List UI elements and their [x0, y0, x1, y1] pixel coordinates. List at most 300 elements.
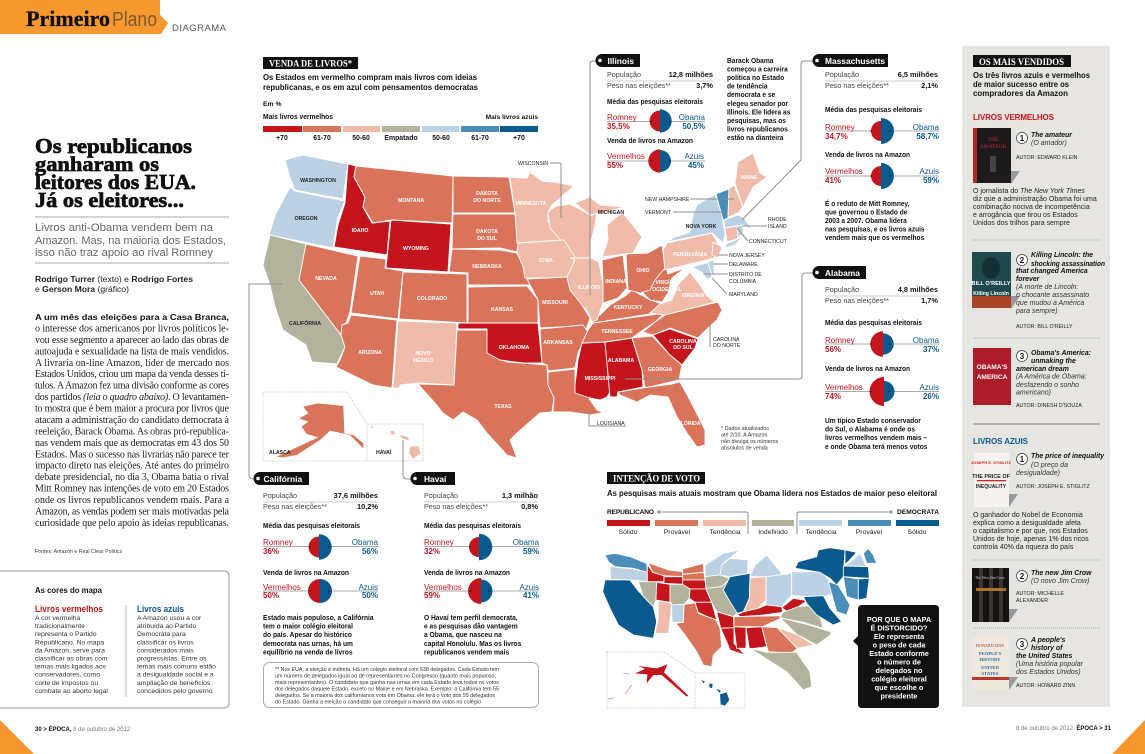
map callout labels [518, 161, 788, 427]
chart: vendas California: 50% [362, 591, 378, 600]
panel heading: venda de livros: VENDA DE LIVROS* [269, 58, 352, 68]
map labels: WASHINGTON [300, 178, 336, 184]
map callout labels: NEW HAMPSHIRE [645, 197, 690, 203]
callout: por que o mapa é distorcido: colégio eleitoral [871, 674, 927, 684]
text: livros vermelhos: temas mais ligados aos [35, 664, 107, 671]
cartogram: voting intention [603, 548, 877, 690]
text: livros vermelhos: representa o Partido [35, 631, 97, 638]
text: Massachusetts note: É o reduto de Mitt Romney, [825, 199, 910, 208]
card: Illinois [596, 54, 713, 173]
chart: pesquisas Alabama: 56% [825, 345, 841, 354]
book: Obama's America: AMERICA [977, 374, 1008, 381]
map labels: NEBRASKA [472, 264, 502, 270]
book: Killing Lincoln: o chocante assassinato [1016, 292, 1089, 299]
card: Massachusetts: Média das pesquisas eleitorais [825, 105, 922, 114]
body text: o interesse dos americanos por livros políticos le- [35, 323, 229, 334]
map labels: MONTANA [398, 198, 424, 204]
text: livros vermelhos: classificar as obras com [35, 656, 108, 662]
text: Barack Obama note: Illinois. Ele lidera as [727, 109, 791, 116]
text: Massachusetts note [825, 199, 925, 242]
US map: book sales by state [263, 153, 767, 458]
chart: pesquisas Alabama: Romney [825, 336, 855, 345]
map callout labels: LOUISIANA [597, 421, 625, 427]
book: The price of inequality: (O preço da [1031, 462, 1068, 469]
card: Alabama: População [825, 285, 859, 294]
book: The new Jim Crow: (O novo Jim Crow) [1031, 578, 1089, 585]
footer right [1016, 720, 1145, 754]
body text: curiosidade que pelo apoio às ideias republicanas. [35, 518, 229, 529]
book: Killing Lincoln: (A morte de Lincoln: [1016, 284, 1078, 291]
book: The new Jim Crow: ALEXANDER [1016, 598, 1048, 604]
card: Havai: População [424, 491, 458, 500]
chart: vendas California: 50% [263, 591, 279, 600]
text: livros vermelhos [35, 604, 108, 695]
text: livros vermelhos: conservadores, como [35, 672, 100, 679]
text: Barack Obama note: pesquisas, mas os [727, 118, 786, 125]
chart: vendas Havai: Vermelhos [424, 583, 462, 592]
header: Primeiro Plano tab: DIAGRAMA [172, 23, 227, 34]
book: The amateur: AMATEUR [980, 144, 1007, 150]
text: livros vermelhos: A cor vermelha [35, 615, 81, 622]
map labels: FLÓRIDA [677, 419, 701, 427]
chart: vendas Massachusetts: 59% [923, 176, 939, 185]
book: Obama's America: (A América de Obama: [1016, 374, 1087, 380]
map labels: ARIZONA [358, 350, 382, 356]
panel heading: venda de livros: Em % [263, 101, 282, 108]
panel heading: intenção de voto: As pesquisas mais atuais mostram que Obama lidera nos Estados de maior peso eleitoral [607, 489, 937, 498]
callout: por que o mapa é distorcido: POR QUE O MAPA [867, 615, 932, 624]
map callout labels: COLÚMBIA [729, 278, 757, 285]
legend: venda de livros: Mais livros vermelhos [263, 114, 333, 121]
text: livros azuis: temas mais comuns estão [137, 664, 216, 671]
book: Killing Lincoln: AUTOR: BILL O'REILLY [1016, 324, 1073, 330]
text: Alabama note: e onde Obama terá menos votos [825, 444, 928, 451]
chart: pesquisas California: Obama [352, 538, 379, 547]
panel: as cores do mapa [0, 571, 229, 708]
legend: intenção de voto [607, 509, 939, 536]
leader lines [249, 61, 813, 479]
card: Alabama: Média das pesquisas eleitorais [825, 318, 922, 327]
book: Killing Lincoln [972, 252, 1105, 330]
chart: vendas Havai [424, 578, 539, 604]
book: Killing Lincoln: 2 [1020, 256, 1025, 265]
text: The amateur description [973, 188, 1097, 227]
chart: vendas California: Azuis [358, 583, 378, 592]
book: Obama's America: americano) [1016, 390, 1051, 396]
card: Havai [410, 472, 540, 656]
card: Illinois: 12,8 milhões [669, 70, 713, 79]
chart: vendas Havai: Azuis [519, 583, 539, 592]
book: A people's history: UNITED [981, 665, 1000, 670]
text: livros azuis: concedidos pelo governo [137, 688, 213, 695]
text: Barack Obama note: estão na dianteira [727, 135, 784, 142]
card: California: Peso nas eleições** [263, 502, 327, 511]
chart: pesquisas Havai [424, 534, 540, 560]
map labels: VIRGÍNIA [655, 278, 679, 286]
legend: venda de livros: +70 [276, 135, 288, 142]
text: livros vermelhos: combate ao aborto legal [35, 688, 108, 695]
map labels: ILLINOIS [578, 285, 600, 291]
text: Havai note: e as pesquisas dão vantagem [424, 623, 518, 631]
book: The price of inequality: THE PRICE OF [972, 474, 1011, 480]
map labels: INDIANA [605, 279, 627, 285]
text: Barack Obama note [727, 58, 791, 142]
map callout labels: RHODE [768, 217, 787, 223]
chart: pesquisas Alabama: Obama [913, 336, 940, 345]
text: Barack Obama note: livros republicanos [727, 126, 788, 134]
body text: vou esse segmento a aparecer ao lado das obras de [35, 335, 230, 346]
callout: por que o mapa é distorcido: o número de [877, 658, 921, 666]
book: The amateur [973, 128, 1078, 184]
map callout labels: NOVA JERSEY [729, 253, 765, 259]
map labels: MÉXICO [413, 356, 433, 364]
chart: vendas Massachusetts: Vermelhos [825, 167, 863, 176]
card: California: Média das pesquisas eleitorais [263, 521, 360, 530]
footnote box: colégio eleitoral: dos delegados daquele Estado, exceto no Maine e em Nebraska. Exemplo: a Califórnia tem 55 [275, 686, 499, 692]
inset: Alaska and Hawaii: HAVAÍ [376, 448, 392, 456]
cartogram insets: Alaska and Hawaii [607, 652, 745, 708]
map labels: VIRGÍNIA [681, 291, 705, 299]
book: Obama's America [973, 348, 1091, 409]
card: Massachusetts [813, 54, 940, 242]
legend: intenção de voto: Provável [856, 529, 883, 536]
body text: Amazon, as vendas podem ser mais motivadas pela [35, 506, 230, 518]
callout: por que o mapa é distorcido: que escolhe o [875, 683, 924, 692]
callout: por que o mapa é distorcido: É DISTORCIDO? [870, 624, 928, 632]
book: The price of inequality: desigualdade) [1016, 470, 1060, 477]
chart: vendas Alabama [825, 377, 939, 406]
book: The amateur: AUTOR: EDWARD KLEIN [1016, 155, 1078, 161]
body text: reeleição, Barack Obama. As obras pró-republica- [35, 426, 229, 437]
text: The amateur description: Unidos dos trilhos para sempre [973, 220, 1070, 227]
map labels: ALABAMA [608, 358, 634, 364]
text: Barack Obama note: política no Estado [727, 75, 784, 82]
sources note: Fontes: Amazon e Real Clear Politics [35, 549, 122, 555]
map labels: CAROLINA [669, 339, 697, 345]
body text: dos partidos (leia o quadro abaixo). O levantamen- [35, 392, 229, 403]
map labels: ARKANSAS [543, 340, 573, 346]
text: The price of inequality description: controla 40% da riqueza do país [973, 544, 1074, 551]
book: The new Jim Crow: 2 [1020, 572, 1025, 581]
text: Barack Obama note: Barack Obama [727, 58, 774, 65]
card: Havai: Média das pesquisas eleitorais [424, 521, 521, 530]
title: Os republicanos [35, 134, 192, 158]
body text: Mitt Romney nas intenções de voto em 20 Estados [35, 484, 229, 495]
book: Killing Lincoln: Killing Lincoln: the [1031, 252, 1093, 259]
text: Havai note: republicanos vendem mais [424, 649, 509, 656]
chart: vendas Illinois: Azuis [684, 152, 704, 161]
text: Barack Obama note: começou a carreira [727, 66, 788, 74]
text: California note: do país. Apesar do histórico [263, 632, 352, 639]
legend: intenção de voto: Tendência [710, 529, 741, 536]
body text: tulos. A Amazon fez uma divisão conforme as cores [35, 381, 229, 392]
chart: vendas Havai: 59% [424, 591, 440, 600]
chart: vendas Massachusetts [825, 163, 939, 189]
authors byline: e Gerson Mora (gráfico) [35, 285, 129, 294]
chart: pesquisas Havai: Obama [513, 538, 540, 547]
card: Alabama: 4,8 milhões [898, 285, 938, 294]
chart: pesquisas California: 36% [263, 547, 279, 556]
book: A people's history: history of [1031, 645, 1063, 652]
book: A people's history [972, 637, 1084, 690]
card: Havai: 0,8% [521, 502, 538, 511]
book: A people's history: STATES [982, 671, 999, 676]
book: A people's history: 3 [1020, 640, 1025, 649]
card: Massachusetts: Venda de livros na Amazon [825, 150, 910, 159]
map callout labels: CAROLINA [713, 337, 740, 343]
book: A people's history: AUTOR: HOWARD ZINN [1016, 683, 1075, 689]
authors byline [35, 275, 194, 294]
panel: as cores do mapa: As cores do mapa [35, 585, 102, 595]
chart: vendas California: Vermelhos [263, 583, 301, 592]
map labels: PENSILVÂNIA [673, 251, 707, 258]
body text: Estados. Mas o sucesso nas livrarias não parece ter [35, 449, 230, 460]
text: California note [263, 615, 374, 656]
map labels: NOVA YORK [686, 224, 717, 230]
footer left: 30 > ÉPOCA, 8 de outubro de 2012 [35, 725, 131, 733]
card: Alabama: Peso nas eleições** [825, 296, 889, 305]
chart: pesquisas Havai: Romney [424, 538, 454, 547]
book: A people's history: A people's [1030, 637, 1065, 644]
body text: to mostra que é bem maior a procura por livros que [35, 404, 230, 414]
map labels: WYOMING [403, 246, 429, 252]
text: The amateur description: diz que a administração Obama foi uma [973, 196, 1097, 203]
footnote box: colégio eleitoral: do Estado. Ganha a eleição o candidato que conseguir a maioria dos votos no colégio [275, 699, 481, 705]
card: Alabama: Venda de livros na Amazon [825, 364, 910, 373]
callout: por que o mapa é distorcido: Estado conforme [869, 649, 929, 658]
book: A people's history: HOWARD ZINN [976, 643, 1004, 648]
chart: pesquisas Massachusetts [825, 118, 940, 144]
map callout labels: WISCONSIN [518, 161, 548, 167]
legend: venda de livros: Mais livros azuis [486, 114, 538, 121]
card: California: População [263, 491, 297, 500]
text: livros azuis: Democrata para [137, 631, 186, 638]
legend: intenção de voto: Provável [664, 529, 691, 536]
chart: vendas Illinois: Vermelhos [607, 152, 645, 161]
chart: pesquisas Alabama [825, 331, 940, 357]
book: The price of inequality: The price of inequality [1031, 453, 1105, 460]
chart: vendas Massachusetts: 41% [825, 176, 841, 185]
card: Illinois: Peso nas eleições** [607, 81, 671, 90]
book: Obama's America: american dream [1016, 366, 1069, 373]
map callout labels: DO NORTE [713, 343, 741, 349]
text: livros vermelhos: tradicionalmente [35, 623, 85, 630]
map labels: OREGON [294, 216, 318, 222]
chart: pesquisas Alabama: 37% [923, 345, 939, 354]
panel heading: venda de livros: republicanas, e os em azul com pensamentos democratas [263, 83, 478, 92]
map callout labels: DISTRITO DE [729, 272, 762, 278]
text: Massachusetts note: vendem mais que os vermelhos [825, 235, 924, 242]
footnote: data: absolutos de venda [721, 446, 768, 452]
legend: venda de livros: 61-70 [471, 135, 489, 142]
subtitle: isso não traz apoio ao rival Romney [35, 247, 213, 259]
body text: A livraria on-line Amazon, líder de mercado nos [35, 358, 229, 369]
title: Já os eleitores... [35, 188, 184, 212]
chart: vendas Alabama: Vermelhos [825, 383, 863, 392]
text: livros azuis [137, 604, 216, 695]
title: leitores dos EUA. [35, 170, 196, 194]
text: The price of inequality description: O ganhador do Nobel de Economia [973, 512, 1083, 519]
card: Illinois: 3,7% [696, 81, 713, 90]
text: The amateur description: e arrogância que tirou os Estados [973, 212, 1078, 219]
map labels: KENTUCKY [614, 305, 643, 311]
card: Massachusetts: 6,5 milhões [898, 70, 938, 79]
legend: venda de livros: 50-60 [352, 135, 370, 142]
book: The amateur: (O amador) [1031, 140, 1067, 147]
book: Killing Lincoln: BILL O'REILLY [972, 281, 1011, 287]
body text: atacam a administração do candidato democrata à [35, 415, 230, 426]
book: A people's history: (Uma história popular [1016, 661, 1084, 668]
card: Illinois: Média das pesquisas eleitorais [607, 97, 703, 106]
book: The amateur: The amateur [1031, 132, 1072, 139]
legend: venda de livros: 50-60 [432, 135, 450, 142]
text: Massachusetts note: 2003 a 2007. Obama lidera [825, 218, 907, 225]
map callout labels: ISLAND [768, 224, 787, 230]
footnote: data: * Dados atualizados [721, 426, 769, 432]
legend: intenção de voto: Tendência [806, 529, 837, 536]
text: Havai note: capital Honolulu. Mas os livros [424, 641, 521, 648]
chart: pesquisas Illinois: Romney [607, 113, 637, 122]
book: The new Jim Crow [972, 568, 1092, 622]
footer left [0, 720, 131, 754]
text: livros azuis: classificar os livros [137, 639, 194, 646]
body text: autoajuda e sexualidade na lista de mais vendidos. [35, 346, 229, 357]
map labels: NOVO [415, 351, 431, 357]
chart: pesquisas Massachusetts: Romney [825, 123, 855, 132]
text: livros vermelhos: corte de impostos ou [35, 680, 98, 687]
legend: intenção de voto: DEMOCRATA [897, 509, 939, 516]
callout: por que o mapa é distorcido: Ele representa [874, 632, 925, 641]
chart: vendas Illinois [607, 149, 705, 173]
footnote box: colégio eleitoral: delegados. Se a maioria dos californianos vota em Obama, ele terá o voto dos 55 delegados [275, 693, 495, 699]
map labels: UTAH [370, 291, 384, 297]
card: Massachusetts: Massachusetts [825, 56, 885, 66]
card: Alabama: Alabama [825, 268, 860, 278]
callout: por que o mapa é distorcido [853, 605, 939, 708]
card: Massachusetts: 2,1% [921, 81, 938, 90]
map labels: IDAHO [352, 228, 368, 234]
panel: os mais vendidos: LIVROS VERMELHOS [973, 113, 1055, 122]
chart: vendas Illinois: 45% [688, 161, 704, 170]
body text: debate presidencial, no dia 3, Obama batia o rival [35, 472, 229, 483]
text: Barack Obama note: democrata e se [727, 92, 775, 99]
chart: vendas Havai: 41% [523, 591, 539, 600]
book: The price of inequality: 1 [1020, 455, 1025, 464]
card: Havai: Havaí [424, 474, 447, 484]
panel: os mais vendidos: de maior sucesso entre os [973, 80, 1070, 89]
card: Massachusetts: População [825, 70, 859, 79]
legend: venda de livros [263, 114, 538, 142]
book: Killing Lincoln: para sempre) [1015, 308, 1058, 315]
book: Killing Lincoln: forever [1016, 276, 1040, 283]
text: Havai note: a Obama, que nasceu na [424, 632, 502, 639]
book: Obama's America: OBAMA'S [977, 364, 1008, 371]
panel: os mais vendidos: compradores da Amazon [973, 89, 1068, 98]
chart: pesquisas California [263, 534, 379, 560]
book: Killing Lincoln: que mudou a América [1016, 300, 1084, 307]
text: livros azuis: considerados mais [137, 647, 194, 654]
map labels: MISSISSIPPI [585, 376, 616, 382]
header: Primeiro Plano tab [0, 0, 227, 34]
header: Primeiro Plano tab: Primeiro [26, 6, 110, 31]
chart: vendas Alabama: Azuis [919, 383, 939, 392]
map callout labels: VERMONT [645, 210, 672, 216]
text: livros azuis: Livros azuis [137, 604, 184, 614]
map callout labels: MARYLAND [729, 292, 758, 298]
map labels: OKLAHOMA [499, 345, 530, 351]
card: California: Venda de livros na Amazon [263, 568, 349, 577]
text: The price of inequality description: explica como a desigualdade afeta [973, 520, 1081, 527]
text: Alabama note: livros vermelhos vendem mais – [825, 435, 927, 442]
book: Obama's America: AUTOR: DINESH D'SOUZA [1016, 403, 1082, 409]
footer right: 8 de outubro de 2012, ÉPOCA > 31 [1016, 724, 1112, 732]
map callout labels: DELAWARE [729, 262, 758, 268]
map labels: DO NORTE [473, 198, 501, 204]
chart: pesquisas Illinois: 35,5% [607, 122, 630, 131]
text: livros azuis: progressistas. Entre os [137, 656, 207, 662]
map labels: MICHIGAN [598, 210, 624, 216]
map callout labels: CONNECTICUT [749, 239, 788, 245]
chart: vendas Alabama: 26% [923, 392, 939, 401]
book: A people's history: the United States [1016, 653, 1072, 660]
card: Havai: 1,3 milhão [502, 491, 538, 500]
map labels: IOWA [539, 258, 553, 264]
panel: os mais vendidos [962, 46, 1110, 707]
book: The price of inequality: JOSEPH E. STIGLITZ [971, 460, 1012, 465]
map labels: DAKOTA [476, 229, 498, 235]
card: Havai: Peso nas eleições** [424, 502, 488, 511]
card: Massachusetts: Peso nas eleições** [825, 81, 889, 90]
map labels: TENNESSEE [601, 329, 633, 335]
panel: os mais vendidos: LIVROS AZUIS [973, 437, 1029, 446]
footnote: data: até 2/10. A Amazon [721, 432, 767, 438]
map labels [289, 175, 758, 427]
body text: onde os livros republicanos vendem mais. Para a [35, 495, 230, 506]
map labels: GEÓRGIA [648, 365, 673, 373]
text: California note: Estado mais populoso, a Califórnia [263, 615, 374, 622]
text: The price of inequality description: o capitalismo e por que, nos Estados [973, 528, 1088, 535]
card: Illinois: Illinois [608, 56, 634, 66]
body text: A um mês das eleições para a Casa Branca, [35, 312, 229, 322]
legend: intenção de voto: REPUBLICANO [607, 509, 654, 516]
card: California: 37,6 milhões [334, 491, 378, 500]
card: California: 10,2% [357, 502, 378, 511]
book: Killing Lincoln: that changed America [1016, 268, 1088, 275]
map labels: COLORADO [417, 296, 447, 302]
text: California note: tem o maior colégio eleitoral [263, 623, 353, 631]
text: livros azuis: atribuída ao Partido [137, 623, 197, 630]
subtitle: Amazon. Mas, na maioria dos Estados, [35, 235, 226, 247]
book: Killing Lincoln: shocking assassination [1031, 261, 1105, 268]
card: Illinois: Venda de livros na Amazon [607, 136, 693, 145]
book: Killing Lincoln: Killing Lincoln [973, 291, 1009, 297]
map labels: DO SUL [673, 345, 694, 351]
footnote box: colégio eleitoral: um número de delegados igual ao de representantes no Congresso (quanto mais populoso, [275, 674, 496, 680]
text: livros azuis: a desigualdade social e a [137, 672, 214, 679]
map labels: TEXAS [494, 404, 512, 410]
map labels: OHIO [636, 268, 650, 274]
map labels: DAKOTA [476, 191, 498, 197]
panel heading: intenção de voto: INTENÇÃO DE VOTO [613, 474, 700, 484]
card: Alabama: 1,7% [921, 296, 938, 305]
chart: pesquisas Massachusetts: 34,7% [825, 132, 848, 141]
inset: Alaska and Hawaii: ALASCA [269, 450, 291, 456]
chart: pesquisas Havai: 32% [424, 547, 440, 556]
book: A people's history: PEOPLE'S [979, 651, 1002, 656]
map labels: NEVADA [315, 276, 337, 282]
chart: pesquisas Illinois [607, 109, 706, 133]
card: California: Califórnia [264, 474, 302, 484]
